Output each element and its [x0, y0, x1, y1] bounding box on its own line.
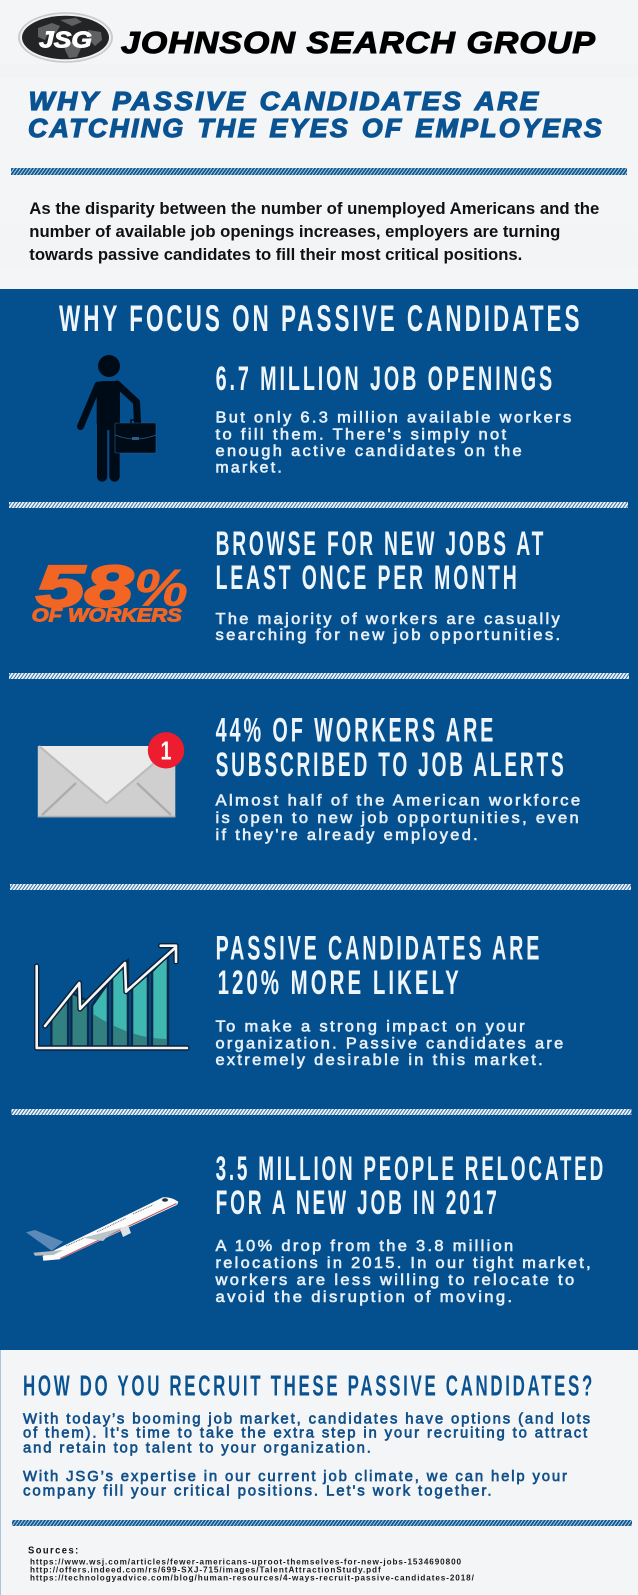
stat: 3.5 million relocated: workers are less willing to relocate to [214, 1272, 576, 1289]
stat: 120% more likely: 120% MORE LIKELY [218, 964, 462, 1002]
title [28, 88, 604, 143]
icon: envelope with notification badge [38, 732, 184, 817]
stat: 44% subscribed to job alerts: is open to new job opportunities, even [216, 810, 581, 827]
call to action text: of them). It's time to take the extra step in your recruiting to attract [23, 1425, 589, 1442]
stat: browse for new jobs [216, 525, 562, 644]
call to action text: company fill your critical positions. Let's work together. [23, 1483, 494, 1500]
icon: 58% of workers: % [134, 560, 188, 618]
stat: 6.7 million job openings: But only 6.3 million available workers [216, 410, 574, 427]
stat: 120% more likely: extremely desirable in this market. [216, 1052, 545, 1069]
stat: 6.7 million job openings: market. [216, 460, 284, 477]
stat: 44% subscribed to job alerts: if they're already employed. [216, 827, 480, 844]
icon: 58% of workers: OF WORKERS [32, 605, 183, 626]
panel: why focus on passive candidates [0, 289, 638, 1350]
stat: 6.7 million job openings [216, 360, 574, 477]
sources: Sources: [28, 1545, 80, 1556]
stat: 3.5 million relocated: A 10% drop from the 3.8 million [216, 1238, 516, 1255]
call to action text: and retain top talent to your organization. [23, 1439, 373, 1456]
intro text: towards passive candidates to fill their most critical positions. [29, 246, 522, 264]
stat: browse for new jobs: searching for new job opportunities. [216, 627, 562, 644]
icon: 58% of workers: 58 [36, 555, 134, 620]
stat: 120% more likely: To make a strong impact on your [216, 1019, 527, 1036]
company name: JOHNSON SEARCH GROUP [121, 25, 596, 60]
stat: 3.5 million relocated: relocations in 2015. In our tight market, [216, 1255, 593, 1272]
intro text: number of available job openings increases, employers are turning [29, 223, 560, 241]
call to action text: With JSG’s expertise in our current job climate, we can help your [23, 1468, 569, 1485]
sources [28, 1545, 475, 1583]
stat: browse for new jobs: The majority of workers are casually [216, 611, 562, 628]
intro text [29, 200, 599, 264]
sources: http://offers.indeed.com/rs/699-SXJ-715/images/TalentAttractionStudy.pdf [30, 1566, 382, 1575]
icon: 58% of workers [32, 555, 188, 626]
stat: 3.5 million relocated [214, 1150, 606, 1306]
icon: person with briefcase [80, 355, 156, 482]
stat: 44% subscribed to job alerts [216, 712, 582, 844]
sources: https://technologyadvice.com/blog/human-resources/4-ways-recruit-passive-candidates-2018/ [30, 1574, 475, 1583]
stat: 3.5 million relocated: avoid the disruption of moving. [216, 1289, 514, 1306]
intro text: As the disparity between the number of unemployed Americans and the [29, 200, 599, 218]
logo: JSG globe badge [18, 12, 113, 63]
stat: 44% subscribed to job alerts: Almost half of the American workforce [216, 793, 582, 810]
call to action text [23, 1410, 592, 1500]
icon: airplane taking off [26, 1197, 178, 1261]
logo: JSG globe badge: JSG [39, 26, 92, 52]
stat: 120% more likely: organization. Passive candidates are [216, 1036, 566, 1053]
title: WHY PASSIVE CANDIDATES ARE [28, 88, 540, 116]
sources: https://www.wsj.com/articles/fewer-americans-uproot-themselves-for-new-jobs-1534690800 [30, 1558, 462, 1567]
call to action text: With today’s booming job market, candidates have options (and lots [23, 1410, 592, 1427]
stat: 6.7 million job openings: to fill them. There's simply not [216, 426, 508, 443]
stat: 6.7 million job openings: enough active candidates on the [216, 443, 524, 460]
icon: envelope with notification badge: 1 [160, 736, 172, 766]
icon: rising chart with arrow [37, 946, 187, 1048]
title: CATCHING THE EYES OF EMPLOYERS [28, 115, 604, 143]
stat: 120% more likely [216, 930, 566, 1069]
